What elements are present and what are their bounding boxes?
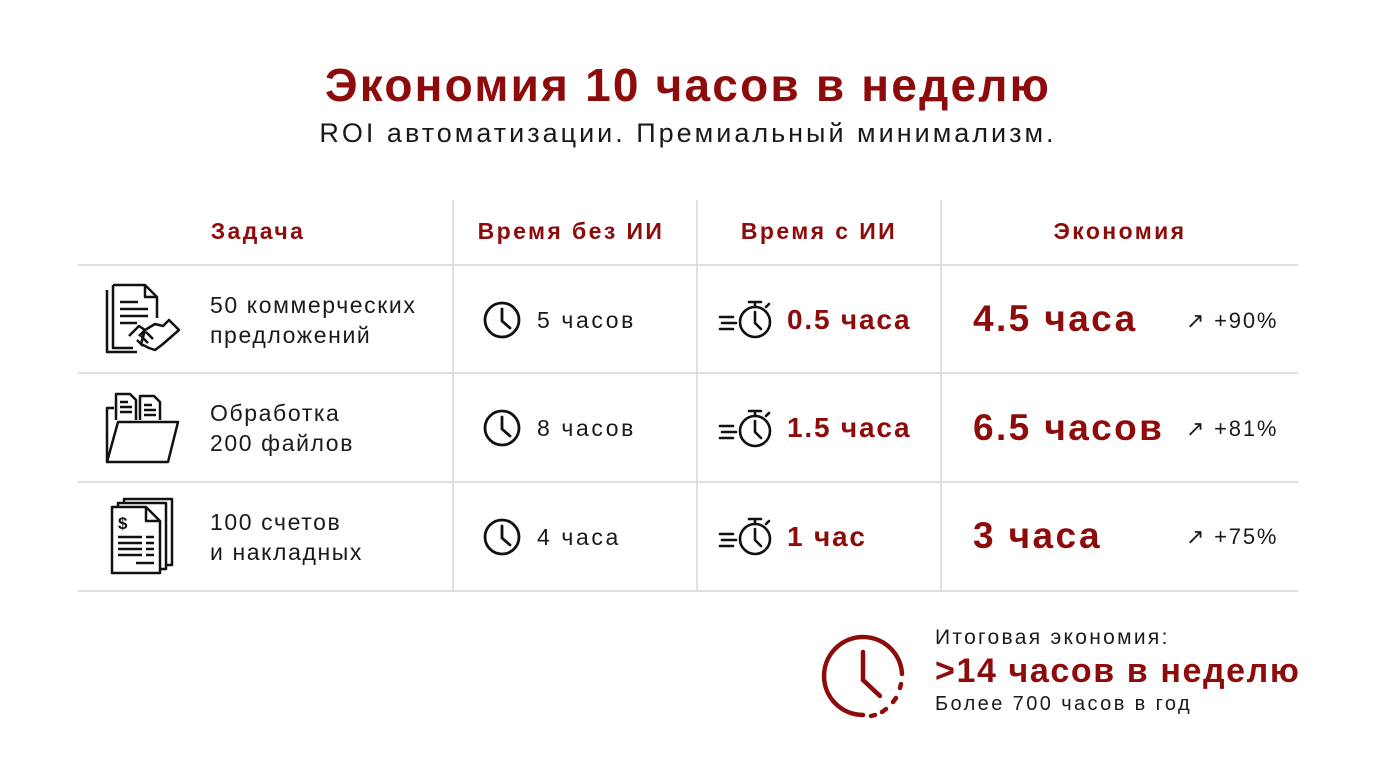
- header: without AI: Время без ИИ: [478, 218, 664, 244]
- total callout: >14 часов в неделю: [935, 652, 1301, 690]
- text: ↗ +90%: [1186, 308, 1278, 333]
- icon: invoices: $: [118, 514, 128, 533]
- row 3 values: 4 часа: [537, 524, 621, 550]
- header: savings: Экономия: [1053, 218, 1187, 244]
- text: ↗ +75%: [1186, 524, 1278, 549]
- text: 0.5 часа: [787, 304, 911, 335]
- text: 3 часа: [973, 515, 1102, 556]
- icon: proposals handshake: [106, 284, 180, 354]
- text: 1.5 часа: [787, 412, 911, 443]
- total callout: Более 700 часов в год: [935, 693, 1192, 715]
- text: 4.5 часа: [973, 298, 1138, 339]
- total callout: Итоговая экономия:: [935, 626, 1170, 649]
- task 1: [210, 292, 416, 348]
- task 1: 50 коммерческих: [210, 292, 416, 318]
- header: task: Задача: [211, 218, 305, 244]
- task 3: и накладных: [210, 539, 363, 565]
- header: with AI: Время с ИИ: [741, 218, 897, 244]
- row 2 values: 8 часов: [537, 415, 636, 441]
- task 2: Обработка: [210, 400, 340, 426]
- subtitle: ROI автоматизации. Премиальный минимализм.: [319, 118, 1057, 148]
- task 1: предложений: [210, 322, 371, 348]
- icon: total clock: [822, 634, 904, 718]
- icon: invoices: [110, 498, 174, 574]
- text: 1 час: [787, 521, 867, 552]
- task 3: 100 счетов: [210, 509, 341, 535]
- task 2: [210, 400, 354, 456]
- task 2: 200 файлов: [210, 430, 354, 456]
- total callout: [935, 626, 1301, 715]
- icon: folder with files: [106, 392, 180, 464]
- row 1 values: 5 часов: [537, 307, 636, 333]
- text: 6.5 часов: [973, 407, 1164, 448]
- title: Экономия 10 часов в неделю: [325, 59, 1051, 111]
- task 3: [210, 509, 363, 565]
- text: ↗ +81%: [1186, 416, 1278, 441]
